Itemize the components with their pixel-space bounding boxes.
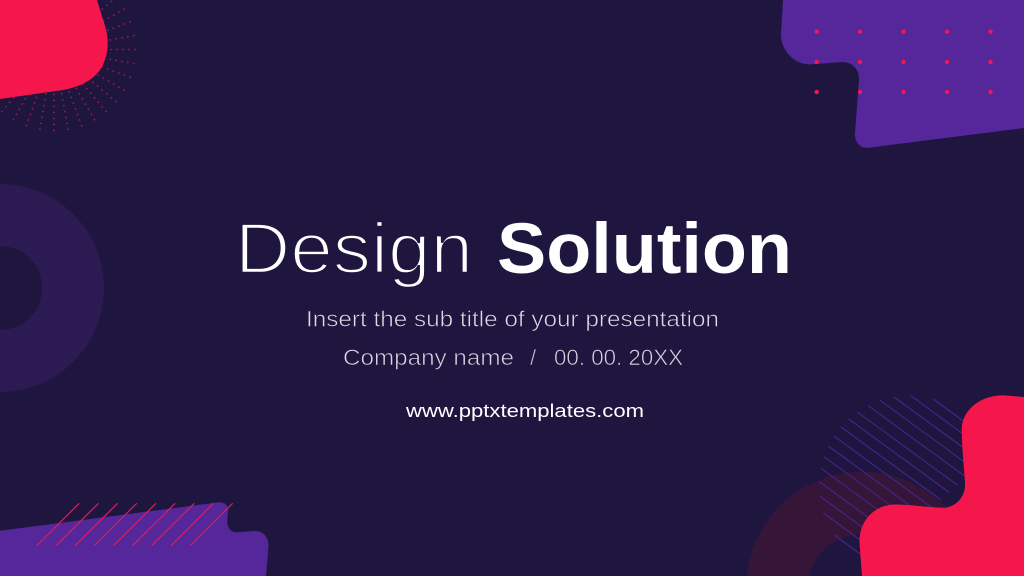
dot grid: top right <box>814 30 993 94</box>
arc: bottom right dark red ring <box>747 472 977 576</box>
blob: top left red <box>0 0 108 99</box>
blob: top right purple <box>781 0 1024 148</box>
blob: bottom left purple <box>0 502 269 576</box>
date: 00. 00. 20XX <box>554 345 683 370</box>
subtitle: Insert the sub title of your presentation <box>306 306 719 332</box>
website url: www.pptxtemplates.com <box>405 401 644 421</box>
hatch lines: bottom right <box>819 396 1024 572</box>
separator slash: / <box>530 345 537 370</box>
title: Solution: Solution <box>497 210 792 289</box>
title: Design: Design <box>235 210 473 289</box>
radial dots: top left <box>0 0 135 130</box>
ring: left faint circle <box>0 184 104 392</box>
company name: Company name <box>343 345 514 370</box>
hatch lines: bottom left red <box>37 503 233 546</box>
blob: bottom right red <box>859 395 1024 576</box>
